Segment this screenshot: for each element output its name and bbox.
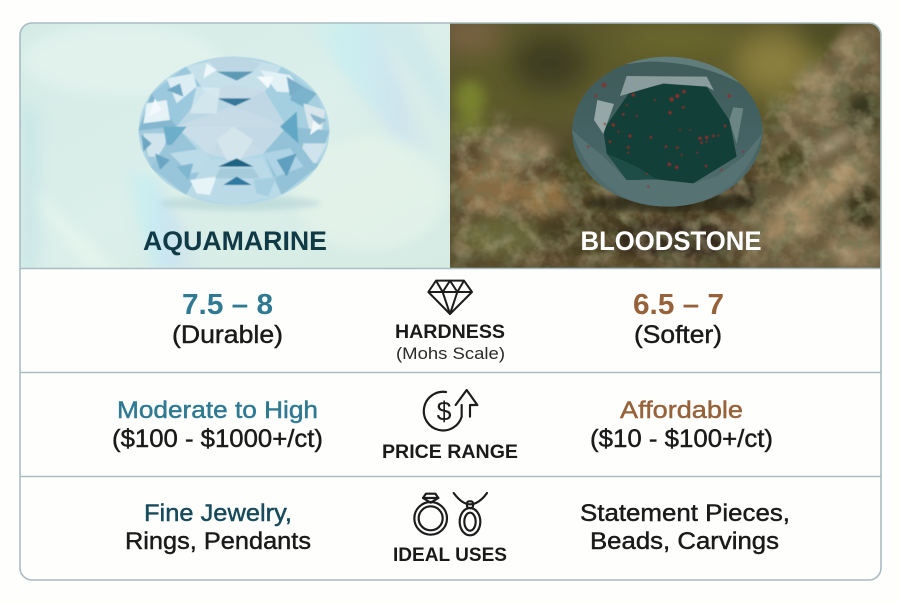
icon: ring and pendant: [414, 493, 487, 535]
bloodstone price value: ($10 - $100+/ct): [590, 425, 773, 453]
bloodstone uses: [580, 500, 790, 555]
bloodstone price value: [590, 397, 773, 453]
aquamarine price value: ($100 - $1000+/ct): [112, 425, 323, 453]
icon: dollar with up arrow: [424, 390, 477, 430]
aquamarine hardness value: 7.5 – 8: [182, 289, 273, 321]
aquamarine hardness value: (Durable): [172, 321, 283, 349]
rock on the right: [723, 23, 883, 270]
gem shadow: [160, 196, 320, 211]
gem shadow: [585, 193, 755, 213]
label: Bloodstone: BLOODSTONE: [580, 226, 762, 256]
hardness label: (Mohs Scale): [396, 344, 505, 363]
icon: bloodstone gem: [572, 56, 763, 207]
row: ideal uses: [125, 493, 790, 566]
row dividers: [20, 268, 881, 476]
hardness label: [395, 322, 505, 363]
price range label: PRICE RANGE: [382, 442, 518, 463]
label: Aquamarine: AQUAMARINE: [143, 226, 327, 256]
panel: bloodstone photo: [440, 20, 883, 270]
ideal uses label: IDEAL USES: [393, 545, 507, 566]
bloodstone hardness value: (Softer): [634, 321, 722, 349]
bloodstone price value: Affordable: [620, 397, 743, 424]
icon: dollar with up arrow: $: [437, 397, 452, 427]
icon: diamond: [428, 281, 472, 314]
aquamarine uses: [125, 500, 311, 555]
aquamarine uses: Rings, Pendants: [125, 528, 311, 555]
rock texture: [450, 23, 881, 268]
aquamarine hardness value: [172, 289, 283, 349]
hardness label: HARDNESS: [395, 322, 505, 343]
aquamarine price value: [112, 397, 323, 453]
aquamarine uses: Fine Jewelry,: [144, 500, 292, 527]
aquamarine price value: Moderate to High: [117, 397, 318, 424]
icon: aquamarine gem: [138, 55, 330, 205]
bloodstone hardness value: 6.5 – 7: [633, 289, 724, 321]
bloodstone uses: Statement Pieces,: [580, 500, 790, 527]
row: hardness: [172, 281, 724, 363]
row: price range: [112, 390, 773, 463]
bloodstone uses: Beads, Carvings: [590, 528, 779, 555]
bloodstone hardness value: [633, 289, 724, 349]
panel: aquamarine photo: [20, 20, 450, 270]
